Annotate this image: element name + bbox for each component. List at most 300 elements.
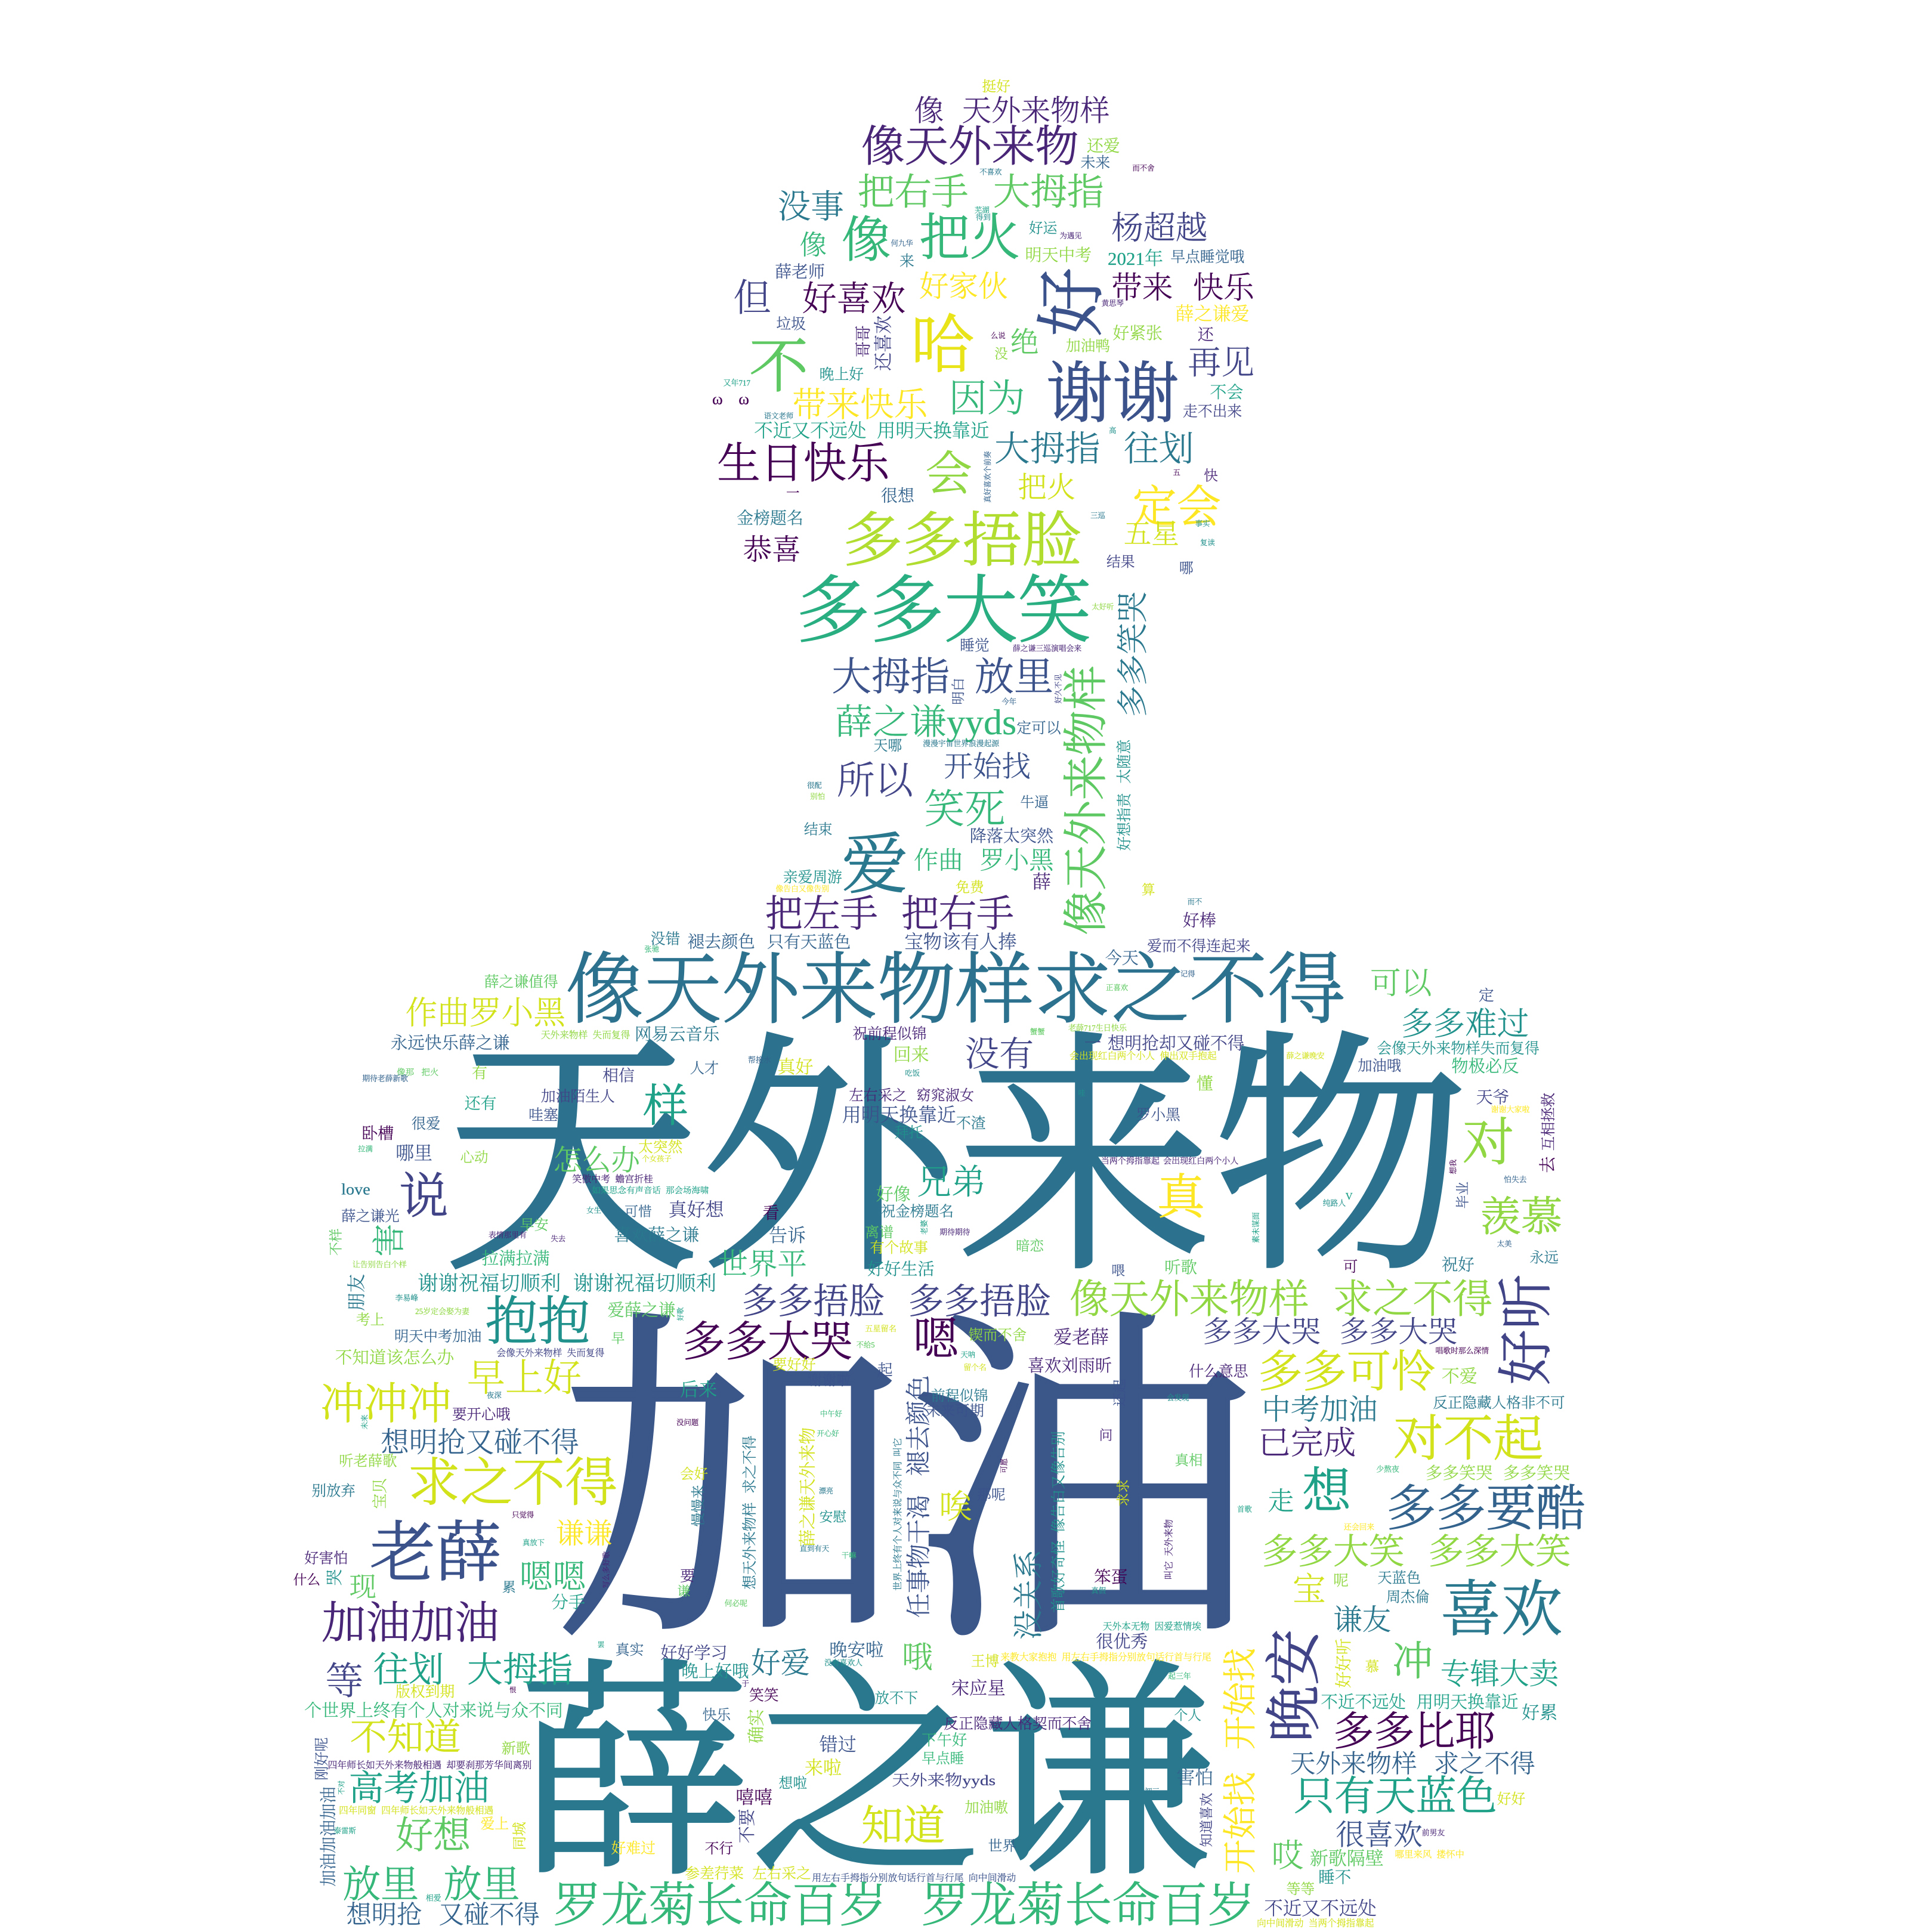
word: 抱抱: 抱抱 <box>486 1293 590 1350</box>
word: 冲冲冲: 冲冲冲 <box>320 1380 452 1429</box>
small words: lower left <box>293 1373 1016 1930</box>
small words: lower left: 谢谢啦 <box>808 1373 851 1389</box>
small words: left shoulder: 好歌 <box>676 1307 684 1321</box>
small words: head and neck: 结果 <box>1106 554 1135 570</box>
small words: left shoulder: 祝金榜题名 <box>881 1204 954 1220</box>
small words: lower left: 只觉得 <box>512 1511 534 1519</box>
small words: lower left: 要开心哦 <box>452 1407 511 1423</box>
small words: left shoulder: 五星留名 <box>865 1324 897 1333</box>
small words: head and neck: 走不出来 <box>1183 403 1242 420</box>
small words: left shoulder: 没错 <box>651 931 680 947</box>
small words: head and neck: 得到 <box>976 213 991 222</box>
word: 好想: 好想 <box>395 1815 471 1857</box>
small words: lower left: 天外来物yyds <box>892 1772 996 1789</box>
small words: left shoulder: 不样 <box>329 1228 344 1256</box>
small words: lower right: 那呢 <box>977 1488 1006 1503</box>
small words: lower left: 开心好 <box>817 1429 839 1438</box>
small words: head and neck: 还爱 <box>1087 137 1120 156</box>
small words: lower right: 个人 <box>1174 1708 1201 1723</box>
small words: lower left: 写么多好歌 <box>601 1551 610 1588</box>
small words: head and neck: 开始找 <box>944 751 1031 783</box>
small words: left shoulder: 左右采之 窈窕淑女 <box>849 1088 974 1104</box>
small words: right shoulder: 懂 <box>1197 1074 1213 1093</box>
word: 高考加油: 高考加油 <box>349 1769 489 1808</box>
small words: head and neck: 没 <box>994 347 1008 361</box>
word: 开始找 vertical pair <box>1222 1648 1260 1874</box>
small words: right shoulder: 哇 <box>1078 1089 1085 1097</box>
small words: right shoulder: 想我 <box>1449 1160 1458 1174</box>
small words: right shoulder: 当两个拇指靠起 会出现红白两个小人 <box>1101 1156 1238 1166</box>
small words: right shoulder: 祝好 <box>1442 1256 1474 1274</box>
small words: left shoulder: 哇塞 <box>528 1107 558 1124</box>
small words: head and neck: 好久不见 <box>1054 674 1063 704</box>
word: 多多捂脸 多多捂脸: 多多捂脸 多多捂脸 <box>742 1282 1051 1321</box>
small words: left shoulder: 25岁定会娶为妻 <box>415 1306 470 1316</box>
small words: lower left: 世界上终有个人对来说与众不同叫它 <box>892 1438 903 1591</box>
small words: head and neck: 未来 <box>1081 154 1110 171</box>
small words: left shoulder: 卧槽 <box>361 1125 394 1143</box>
small words: lower left: 唉 <box>939 1489 972 1526</box>
small words: lower right: 哪里来风 搂怀中 <box>1395 1849 1464 1860</box>
small words: lower right: 新歌隔壁 <box>1310 1848 1384 1869</box>
small words: lower left: 嗯嗯 <box>520 1559 586 1596</box>
small words: lower left: 直到有天 <box>800 1544 829 1553</box>
small words: lower left: 没有喜欢人 <box>824 1658 863 1667</box>
small words: lower left: 真放下 <box>523 1538 545 1547</box>
small words: head and neck: 明白 <box>951 678 966 705</box>
small words: head and neck: 降落太突然 <box>970 827 1054 846</box>
small words: head and neck: 一 <box>786 486 800 501</box>
small words: left shoulder: 张驰 <box>644 945 659 954</box>
small words: lower right: 前男友 <box>1422 1828 1445 1837</box>
small words: lower right: 走 <box>1268 1488 1294 1516</box>
small words: lower left: 早点睡 <box>922 1751 964 1767</box>
word: 多多可怜: 多多可怜 <box>1258 1348 1436 1397</box>
small words: right shoulder: 天呐 <box>960 1350 975 1359</box>
small words: left shoulder: 老婆 <box>919 1219 928 1235</box>
word: 好听 vertical: 好听 <box>1496 1274 1557 1385</box>
small words: head and neck: 薛之谦爱 <box>1176 304 1250 324</box>
small words: left shoulder: 心动 <box>460 1149 489 1166</box>
small words: left shoulder: 离谱 <box>865 1225 894 1241</box>
small words: head and neck: 2021年 <box>1108 248 1163 269</box>
small words: head and neck: 所以 <box>837 759 914 802</box>
small words: lower right: 已完成 <box>1258 1425 1356 1461</box>
small words: head and neck: 为遇见 <box>1059 231 1082 240</box>
small words: lower left: 夜深 <box>487 1391 502 1400</box>
small words: lower right: 专辑大卖 <box>1441 1658 1559 1690</box>
small words: head and neck: 好想指责 <box>1117 793 1133 851</box>
word: 多多大哭: 多多大哭 <box>682 1318 852 1365</box>
small words: head and neck: 复读 <box>1200 538 1215 547</box>
small words: head and neck: 事实 <box>1195 519 1210 528</box>
small words: lower right: 反正隐藏人格非不可 <box>1433 1395 1565 1411</box>
small words: left shoulder: 兄弟 <box>917 1163 986 1202</box>
small words: right shoulder: 爱老薛 <box>1053 1327 1109 1348</box>
small words: head and neck: 定可以 <box>1016 720 1062 737</box>
small words: lower left: 后来 <box>680 1379 717 1400</box>
word: 生日快乐: 生日快乐 <box>717 440 890 487</box>
small words: lower right: 呢 <box>1333 1572 1349 1590</box>
word: 开始找 vertical pair: 开始找 <box>1222 1648 1260 1749</box>
small words: right shoulder: 纯路人 <box>1323 1198 1346 1207</box>
small words: lower right: 慕 <box>1365 1659 1379 1675</box>
small words: lower right: 来教大家抱抱 用左右手拇指分别放句话行首与行尾 <box>1000 1652 1211 1663</box>
small words: head and neck: 薛之谦yyds <box>836 703 1016 742</box>
small words: lower right: 谦友 <box>1333 1605 1391 1636</box>
small words: head and neck: 好紧张 <box>1112 324 1163 343</box>
small words: left shoulder: 很爱 <box>412 1116 440 1132</box>
small words: lower left: 参差荇菜 左右采之 <box>685 1865 811 1882</box>
small words: lower right: 少熬夜 <box>1376 1464 1399 1473</box>
word: 多多比耶: 多多比耶 <box>1333 1709 1496 1754</box>
small words: left shoulder: 看 <box>763 1204 780 1223</box>
small words: lower right: 王博 <box>971 1653 999 1670</box>
small words: head and neck: 薛之谦三巡演唱会来 <box>1013 644 1081 653</box>
small words: left shoulder: 期待老薛新歌 <box>362 1074 408 1083</box>
small words: lower right: 好累 <box>1522 1704 1557 1723</box>
small words: head and neck: 来 <box>899 253 914 270</box>
small words: lower right: 害怕 <box>1176 1767 1213 1788</box>
small words: lower right: 向中间滑动 当两个拇指靠起 <box>1257 1918 1374 1929</box>
small words: lower left: 慢慢来 <box>690 1485 706 1526</box>
small words: right shoulder: 定 <box>1479 987 1494 1004</box>
small words: lower right: 不近又不远处 <box>1264 1898 1377 1919</box>
small words: lower right: 真假 <box>1091 1586 1106 1595</box>
small words: right shoulder: 物极必反 <box>1451 1057 1519 1076</box>
small words: head and neck: 好运 <box>1029 220 1058 236</box>
word: 不: 不 <box>749 335 808 400</box>
word: 真: 真 <box>1157 1171 1206 1225</box>
small words: head and neck: 绝 <box>1010 327 1038 358</box>
small words: left shoulder: 明天中考加油 <box>394 1329 481 1345</box>
small words: lower right: 可愿 <box>1000 1458 1009 1473</box>
word: 会: 会 <box>925 448 972 500</box>
word: 好 rotated: 好 <box>1034 267 1111 336</box>
small words: left shoulder: 网易云音乐 <box>635 1025 720 1044</box>
small words: right shoulder: 记得 <box>1180 970 1195 978</box>
word: 多多要酷: 多多要酷 <box>1386 1481 1586 1537</box>
small words: head and neck: 太好听 <box>1092 602 1114 611</box>
small words: right shoulder: 不渣 <box>956 1115 986 1132</box>
small words: lower right: 多多笑哭 多多笑哭 <box>1426 1464 1570 1483</box>
small words: head and neck: 因为 <box>949 378 1025 420</box>
small words: head and neck: 不近又不远处 用明天换靠近 <box>754 420 989 441</box>
small words: lower left: 嘻嘻 <box>735 1787 772 1808</box>
small words: lower right: 天蓝色 <box>1377 1570 1421 1586</box>
small words: head and neck: 漫漫宇宙世界浪漫起源 <box>923 739 999 748</box>
small words: head and neck: 芜湖 <box>975 205 990 214</box>
word: 把右手 大拇指: 把右手 大拇指 <box>858 172 1104 213</box>
small words: lower left: 听老薛歌 <box>339 1454 397 1470</box>
small words: lower left: 漂亮 <box>819 1487 833 1495</box>
small words: right shoulder: 谢谢大家啦 <box>1491 1105 1529 1114</box>
small words: lower left: 未来 <box>360 1414 369 1429</box>
small words: left shoulder: 有 <box>472 1064 487 1081</box>
small words: right shoulder: 唱歌时那么深情 <box>1436 1346 1489 1355</box>
small words: lower right: 知道喜欢 <box>1200 1792 1214 1847</box>
word: 嗯: 嗯 <box>913 1314 960 1365</box>
small words: head and neck: 不会 <box>1210 383 1243 402</box>
small words: right shoulder: 喜欢刘雨昕 <box>1028 1356 1112 1375</box>
small words: head and neck: 垃圾 <box>776 316 806 333</box>
small words: lower left: 下午好 <box>922 1732 967 1749</box>
word: 谢谢: 谢谢 <box>1046 358 1179 431</box>
small words: lower left: 何必呢 <box>725 1600 747 1608</box>
small words: lower left: 好难过 <box>611 1840 656 1857</box>
small words: right shoulder: 可 <box>1343 1259 1358 1275</box>
small words: lower left: 想啦 <box>779 1775 807 1791</box>
word: 知道: 知道 <box>861 1803 945 1850</box>
small words: lower left: 不行 <box>705 1841 733 1857</box>
small words: left shoulder: 怎么办 <box>553 1145 641 1176</box>
small words: lower right: 好好 <box>1497 1791 1525 1807</box>
small words: head and neck: 带来 快乐 <box>1111 271 1254 305</box>
small words: head and neck: 么说 <box>991 332 1006 340</box>
small words: lower left: 快乐 <box>702 1707 731 1723</box>
small words: right shoulder: 可以 <box>1370 967 1433 1001</box>
small words: left shoulder: 只有天蓝色 <box>767 933 851 952</box>
small words: right shoulder: 蟹蟹 <box>1030 1028 1045 1036</box>
small words: lower left: 用左右手拇指分别放句话行首与行尾 向中间滑动 <box>812 1872 1016 1883</box>
small words: head and neck: 太随意 <box>1116 739 1133 784</box>
small words: lower right: 初三 <box>1145 1788 1160 1796</box>
word: 把左手 把右手: 把左手 把右手 <box>765 893 1014 935</box>
small words: right shoulder: 一 想明抢却又碰不得 <box>1084 1034 1244 1053</box>
word: 薛之谦: 薛之谦 <box>519 1649 1214 1905</box>
small words: lower right: 周杰倫 <box>1386 1589 1429 1605</box>
small words: lower left: 晚安啦 <box>829 1640 883 1660</box>
small words: lower left: 宝贝 <box>372 1478 389 1509</box>
small words: head and neck: 笑死 <box>924 787 1006 832</box>
small words: left shoulder: 好像 <box>876 1185 911 1204</box>
small words: head and neck: 五星 <box>1124 520 1179 550</box>
small words: lower left: 四年师长如天外来物般相遇 却要刹那芳华间离别 <box>327 1759 531 1770</box>
small words: head and neck: 再见 <box>1188 345 1254 382</box>
small words: lower left: 好好学习 <box>660 1643 728 1662</box>
small words: head and neck: 三巡 <box>1090 512 1106 520</box>
small words: lower right: 首歌 <box>1237 1506 1252 1514</box>
small words: left shoulder: 期待期待 <box>939 1228 970 1237</box>
small words: head and neck: 薛老师 <box>775 262 825 282</box>
small words: lower left: 干嘛 <box>842 1551 857 1560</box>
small words: left shoulder: 永远快乐薛之谦 <box>391 1034 509 1053</box>
small words: lower right: 还会回来 <box>1344 1523 1374 1532</box>
small words: left shoulder: 像那 把火 <box>397 1067 438 1077</box>
small words: head and neck: 真好喜欢个前奏 <box>983 451 992 503</box>
small words: head and neck: 而不舍 <box>1132 164 1155 172</box>
small words: left shoulder: 作曲罗小黑 <box>406 996 565 1031</box>
small words: head and neck: 语文老师 <box>764 411 793 420</box>
small words: head and neck: 像告白又像告别 <box>775 885 829 894</box>
word: 样: 样 <box>643 1082 688 1132</box>
word: 像天外来物样 vertical: 像天外来物样 <box>1062 666 1112 935</box>
small words: lower right: 求求 <box>1116 1479 1131 1507</box>
small words: lower right: 起三年 <box>1168 1672 1191 1681</box>
small words: left shoulder: 有个故事 <box>870 1240 928 1256</box>
small words: head and neck: 又年717 <box>724 378 750 388</box>
small words: left shoulder: 薛之谦值得 <box>484 974 558 991</box>
small words: head and neck: 哥哥 <box>854 325 872 357</box>
small words: lower left: 等 <box>325 1660 363 1702</box>
small words: head and neck: 挺好 <box>982 79 1010 95</box>
small words: right shoulder: 没有 <box>965 1035 1034 1074</box>
small words: right shoulder: 老薛717生日快乐 <box>1068 1023 1127 1033</box>
small words: left shoulder: 祝前程似锦 <box>852 1025 926 1042</box>
small words: right shoulder: 什么意思 <box>1189 1363 1249 1380</box>
small words: lower left: 不对 <box>336 1780 345 1795</box>
small words: head and neck: 睡觉 <box>960 638 990 654</box>
small words: lower right: 宝 <box>1293 1571 1326 1608</box>
small words: head and neck: 何九华 <box>891 239 913 248</box>
word: 像天外来物样 求之不得: 像天外来物样 求之不得 <box>1069 1278 1492 1322</box>
small words: head and neck: 没事 <box>777 189 844 226</box>
small words: left shoulder: 拜托 <box>895 1125 923 1141</box>
small words: lower left: 要 <box>680 1568 695 1584</box>
small words: head and neck: 很配 <box>807 781 822 790</box>
small words: lower left: 未来可期 <box>926 1403 984 1419</box>
small words: left shoulder: 相信 <box>602 1067 635 1085</box>
small words: lower left: 想明抢又碰不得 <box>381 1427 579 1458</box>
small words: head and neck: 作曲 罗小黑 <box>914 846 1054 874</box>
small words: head and neck: 像 <box>800 231 827 261</box>
small words: lower left: 安慰 <box>820 1510 846 1525</box>
small words: lower left: 累 <box>502 1580 516 1595</box>
word: 天外来物: 天外来物 <box>444 1018 1469 1302</box>
small words: lower left: 没问题 <box>676 1418 698 1427</box>
small words: head and neck: 高 <box>1109 426 1117 435</box>
word: 想: 想 <box>1302 1464 1351 1518</box>
word: 求之不得: 求之不得 <box>408 1454 617 1512</box>
small words: lower right: 等等 <box>1287 1881 1315 1897</box>
small words: left shoulder: 世界平 <box>718 1248 807 1281</box>
word: 多多大笑 多多大笑: 多多大笑 多多大笑 <box>1262 1532 1571 1571</box>
small words: lower right: 真相 <box>1175 1452 1203 1469</box>
small words: lower right: 笨蛋 <box>1094 1568 1127 1587</box>
small words: head and neck: 结束 <box>804 821 832 837</box>
small words: lower left: 版权到期 <box>395 1683 455 1700</box>
small words: lower left: 笑笑 <box>749 1687 778 1704</box>
small words: left shoulder: 还有 <box>465 1095 496 1112</box>
word: 羡慕: 羡慕 <box>1480 1194 1562 1240</box>
small words: head and neck: 大拇指 <box>994 429 1101 469</box>
small words: lower left: 来啦 <box>805 1758 842 1779</box>
small words: right shoulder: 罗小黑 <box>1136 1107 1180 1124</box>
small words: lower left: 任事物干渴 <box>905 1495 932 1618</box>
small words: left shoulder: 爱薛之谦 <box>607 1301 675 1320</box>
small words: left shoulder: 表情那里有 <box>489 1231 527 1239</box>
small words: lower left: 刚好呢 <box>314 1737 330 1780</box>
small words: right shoulder: 会像天外来物样失而复得 <box>1377 1040 1540 1057</box>
small words: left shoulder: 真好想 <box>669 1200 724 1220</box>
small words: head and neck: 还喜欢 <box>873 316 894 371</box>
small words: left shoulder: 起 <box>877 1361 893 1378</box>
small words: left shoulder: 拉满 <box>358 1144 373 1153</box>
small words: head and neck: 黄思琴 <box>1102 299 1124 307</box>
small words: head and neck: 哪 <box>1179 561 1194 577</box>
small words: head and neck: 像 天外来物样 <box>914 94 1109 127</box>
small words: lower left: 加油加油加油 <box>319 1786 338 1887</box>
small words: right shoulder: 永远 <box>1530 1250 1559 1266</box>
small words: left shoulder: 考上 <box>356 1312 384 1328</box>
small words: left shoulder: 早 <box>611 1331 625 1346</box>
small words: lower right: 会发现 <box>1167 1393 1189 1402</box>
small words: right shoulder: 多多大哭 多多大哭 <box>1203 1316 1458 1349</box>
small words: lower left: 泰雷斯 <box>334 1827 356 1835</box>
small words: lower left: 同城 <box>512 1822 528 1850</box>
small words: left shoulder: 失去 <box>551 1234 565 1243</box>
small words: left shoulder: 人才 <box>690 1061 719 1077</box>
small words: left shoulder: 薛之谦光 <box>341 1208 400 1225</box>
word: 多多大笑: 多多大笑 <box>796 570 1092 652</box>
small words: lower left: 分手 <box>552 1593 585 1612</box>
small words: lower right <box>944 1379 1570 1929</box>
small words: left shoulder: 让告别告白个样 <box>353 1260 407 1269</box>
small words: lower left: 相爱 <box>426 1893 441 1902</box>
small words: lower right: 好好听 <box>1334 1638 1353 1688</box>
small words: lower right: 天外来物样 求之不得 <box>1290 1750 1535 1778</box>
word: 不知道: 不知道 <box>350 1717 461 1758</box>
word: 往划 大拇指: 往划 大拇指 <box>373 1650 573 1690</box>
small words: head and neck: 别怕 <box>810 792 825 801</box>
small words: lower left: 会好 <box>680 1466 708 1482</box>
small words: head and neck <box>712 79 1254 906</box>
small words: lower left: 真实 <box>616 1642 644 1658</box>
small words: right shoulder: 爱而不得连起来 <box>1147 938 1251 955</box>
small words: left shoulder: 真好 <box>777 1058 813 1077</box>
word: 把火: 把火 <box>919 211 1020 267</box>
word: 定会: 定会 <box>1132 483 1221 532</box>
small words: left shoulder: 告诉 <box>769 1225 806 1246</box>
small words: right shoulder: 太美 <box>1497 1239 1512 1248</box>
small words: lower left: 哭 <box>326 1569 344 1586</box>
word: 哈: 哈 <box>911 311 975 382</box>
small words: head and neck: 还 <box>1198 326 1214 344</box>
small words: left shoulder: 好好生活 <box>867 1260 935 1279</box>
small words: left shoulder: 早上好 <box>467 1357 582 1399</box>
small words: lower left: 薛之谦天外来物 <box>798 1427 817 1546</box>
word: 爱: 爱 <box>842 829 908 902</box>
small words: head and neck: 今年 <box>1001 697 1016 706</box>
small words: right shoulder: 加油哦 <box>1358 1058 1401 1074</box>
small words: lower right: 叫它天外来物 <box>1163 1519 1174 1579</box>
word: 冲: 冲 <box>1392 1639 1433 1684</box>
small words: head and neck: 明天中考 <box>1025 246 1092 265</box>
small words: head and neck: 晚上好 <box>820 366 864 383</box>
word: 老薛: 老薛 <box>370 1517 502 1590</box>
small words: right shoulder: 互相拯救 <box>1541 1093 1557 1151</box>
small words: lower right: 世界 <box>988 1838 1016 1854</box>
word: 多多捂脸: 多多捂脸 <box>843 508 1082 574</box>
small words: left shoulder: 会像天外来物样 失而复得 <box>496 1347 605 1358</box>
small words: head and neck: 把火 <box>1018 472 1075 504</box>
small words: left shoulder: 褪去颜色 <box>688 933 755 952</box>
small words: lower right: 睡不 <box>1318 1868 1351 1886</box>
small words: left shoulder: 谢谢祝福切顺利 谢谢祝福切顺利 <box>418 1272 716 1295</box>
small words: head and neck: 往划 <box>1124 430 1194 469</box>
small words: lower left: 新歌 <box>502 1741 530 1757</box>
small words: lower left: 罢 <box>598 1641 604 1649</box>
small words: left shoulder: 要好好 <box>772 1357 816 1373</box>
small words: head and neck: 但 <box>733 277 771 320</box>
small words: head and neck: 薛 <box>1033 871 1051 892</box>
small words: lower left: 想天外来物样求之不得 <box>742 1436 758 1590</box>
small words: lower left: 谦 <box>678 1584 691 1599</box>
small words: right shoulder: 留个名 <box>963 1364 987 1372</box>
small words: left shoulder: 如果思念有声音话 那会场海啸 <box>592 1185 709 1196</box>
small words: right shoulder: 去 <box>1538 1157 1557 1173</box>
small words: left shoulder: 拉满拉满 <box>482 1249 550 1268</box>
